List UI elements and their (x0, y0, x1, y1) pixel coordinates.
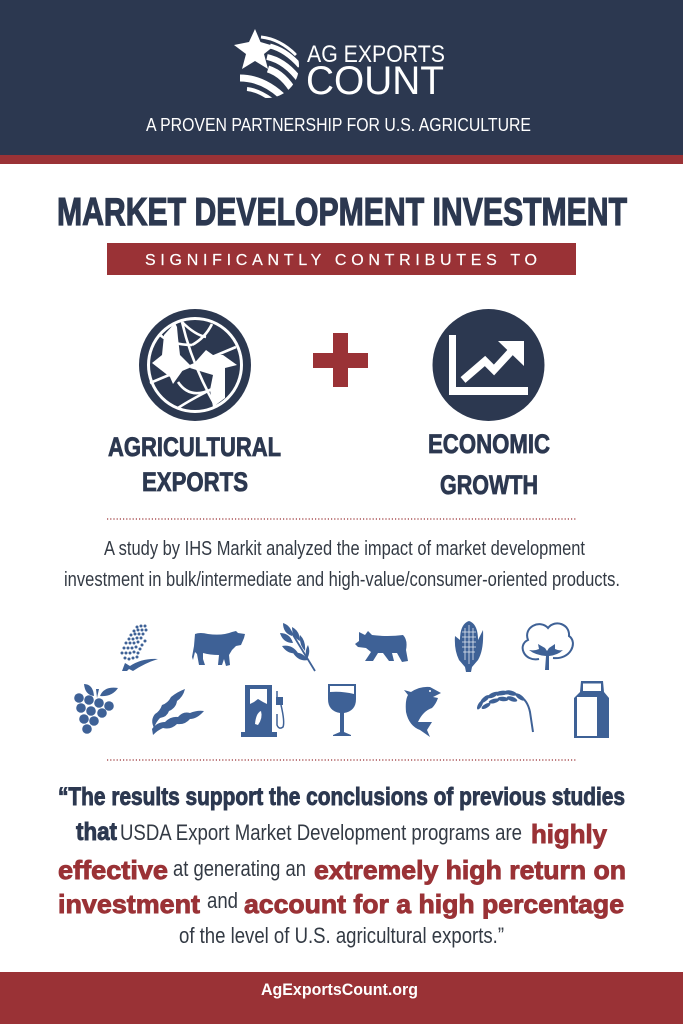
label: economic growth (428, 429, 550, 500)
icon: growth chart (432, 309, 544, 421)
icon: fish (404, 687, 441, 737)
icon: star and striped globe (234, 29, 301, 100)
label: agricultural exports (108, 432, 281, 497)
icon: cow (192, 631, 245, 666)
footer (0, 972, 683, 1024)
quote (58, 783, 626, 948)
quote line 3: effective (58, 855, 168, 885)
icon: wheat (280, 623, 315, 671)
icon: fuel pump (241, 685, 284, 737)
icon: soybeans (152, 689, 204, 735)
icon: plus sign (313, 333, 368, 387)
footer: AgExportsCount.org (261, 980, 418, 999)
quote line 4: account for a high percentage (244, 889, 624, 919)
quote line 4: and (207, 888, 238, 913)
label: economic growth: ECONOMIC (428, 429, 550, 459)
logo wordmark: AG EXPORTS (307, 41, 445, 68)
icon: rice stalk (476, 689, 533, 732)
study description (64, 538, 620, 591)
quote line 2: USDA Export Market Development programs are (120, 820, 522, 845)
quote line 3: extremely high return on (314, 855, 626, 885)
label: agricultural exports: EXPORTS (142, 467, 248, 497)
logo: Ag Exports Count (234, 29, 445, 103)
label: agricultural exports: AGRICULTURAL (108, 432, 281, 462)
study description: A study by IHS Markit analyzed the impact of market development (104, 538, 585, 560)
quote line 3: at generating an (173, 856, 306, 881)
tagline: A PROVEN PARTNERSHIP FOR U.S. AGRICULTURE (146, 115, 531, 135)
quote line 2: highly (531, 819, 608, 849)
label: economic growth: GROWTH (440, 470, 538, 500)
header band (0, 0, 683, 164)
icon: pig (355, 631, 408, 662)
icon: wine glass (328, 684, 356, 736)
quote line 2: that (76, 818, 118, 846)
commodity icons (74, 621, 609, 738)
logo wordmark (306, 41, 445, 103)
icon: globe (139, 309, 251, 421)
red subtitle banner (107, 243, 576, 275)
quote line 4 (58, 888, 624, 919)
quote line 5: of the level of U.S. agricultural exports.” (179, 923, 504, 948)
icon: sorghum (120, 624, 158, 671)
icon: grapes (74, 684, 118, 734)
icon: corn cob (455, 621, 483, 672)
red subtitle banner: SIGNIFICANTLY CONTRIBUTES TO (145, 252, 537, 269)
logo wordmark: COUNT (306, 59, 444, 103)
icon: milk carton (574, 681, 609, 738)
icon: cotton (523, 623, 573, 670)
quote line 4: investment (58, 889, 200, 919)
quote line 3 (58, 855, 626, 885)
